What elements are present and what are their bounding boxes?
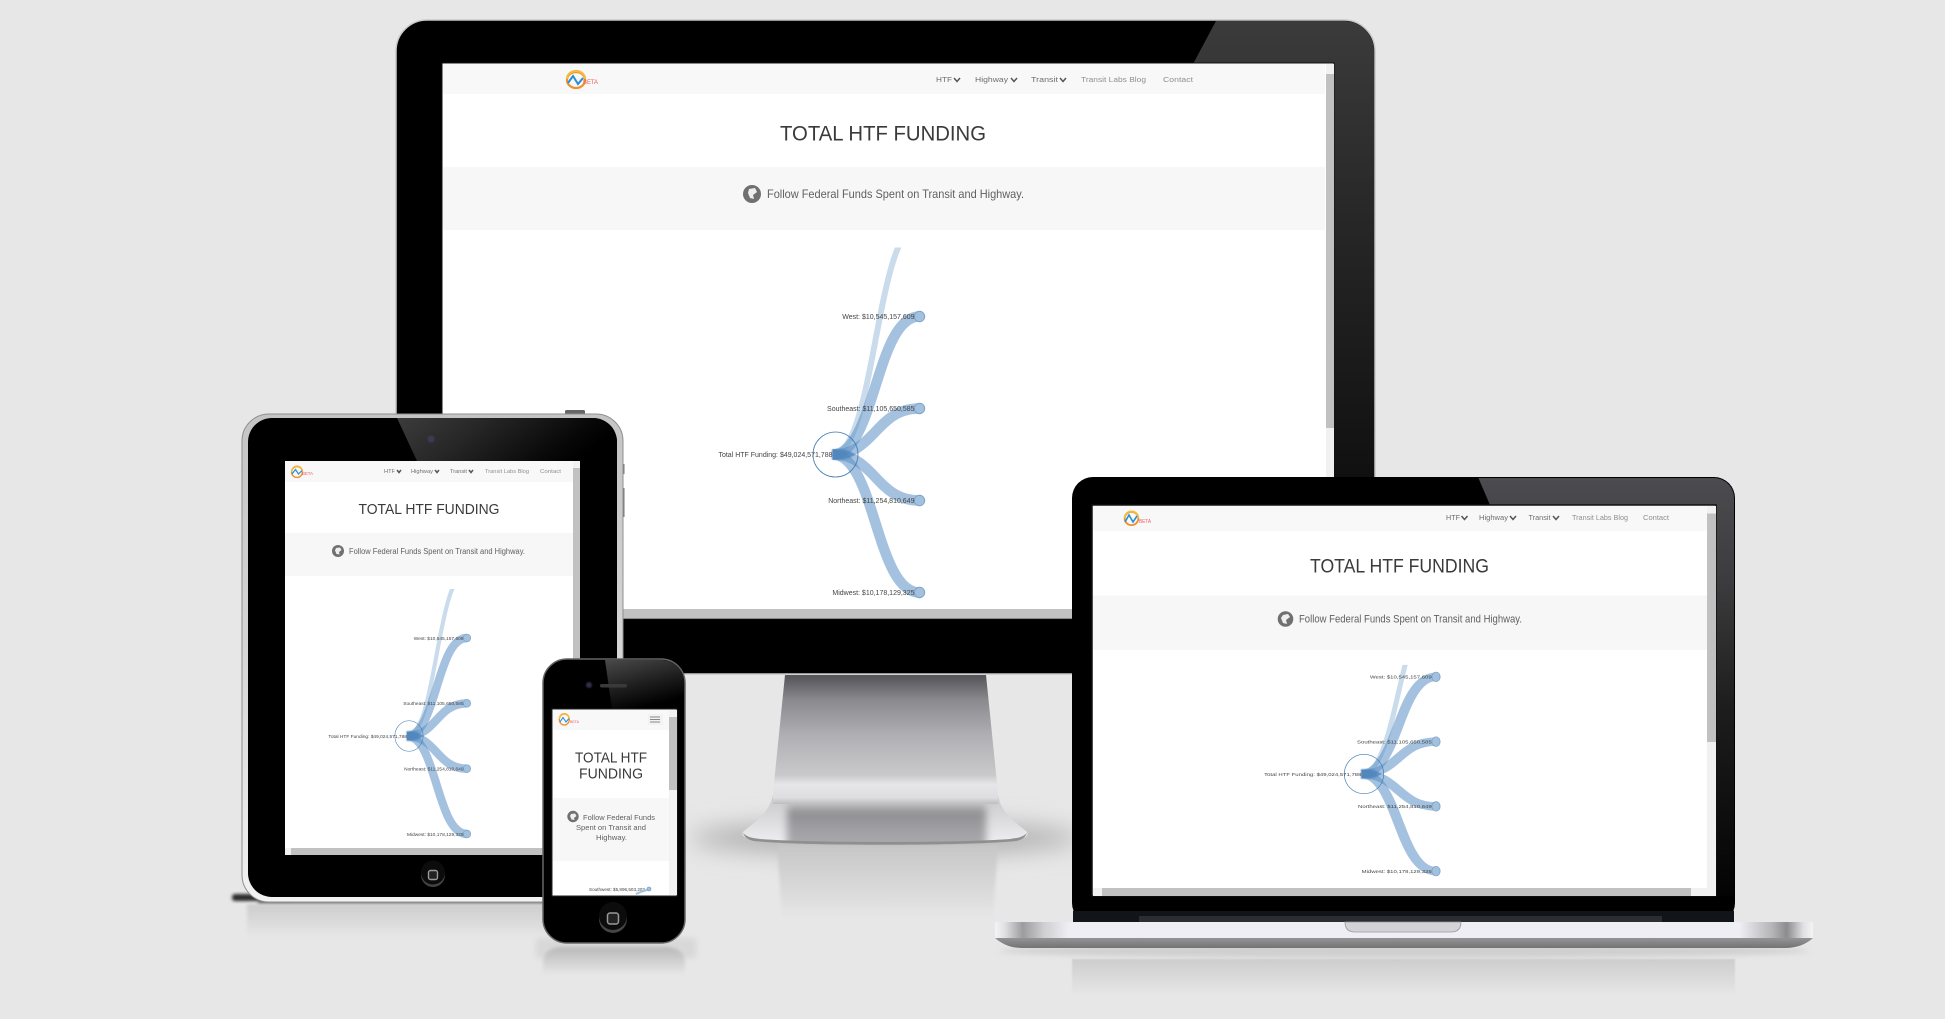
heading: TOTAL HTF FUNDING (1310, 556, 1489, 578)
tablet mockup (232, 410, 624, 938)
navbar: Transit Labs Blog (485, 469, 529, 475)
navbar: Transit (1528, 513, 1551, 522)
icon: globe (1278, 611, 1293, 627)
icon: globe (567, 811, 579, 822)
subtitle band (1093, 596, 1707, 650)
tree flow chart: Northeast: $11,254,810,649 (404, 766, 464, 772)
scrollbar (669, 710, 677, 895)
navbar (553, 710, 669, 730)
monitor bezel (396, 20, 1375, 674)
subtitle band: Follow Federal Funds (583, 813, 655, 822)
monitor stand (742, 675, 1028, 855)
navbar: Transit (1031, 75, 1059, 84)
heading: TOTAL HTF FUNDING (358, 501, 500, 518)
tablet body (242, 414, 623, 902)
tablet home button (421, 860, 445, 887)
laptop lid (1072, 477, 1735, 924)
phone glare (605, 660, 684, 709)
tree flow chart: Total HTF Funding: $49,024,571,788 (1264, 772, 1361, 778)
subtitle band: Follow Federal Funds Spent on Transit and Highway. (349, 547, 525, 556)
logo: BETA (302, 471, 313, 476)
tablet screen (285, 461, 580, 855)
tree flow chart (718, 224, 925, 598)
navbar: HTF (384, 469, 396, 475)
logo (292, 466, 313, 477)
navbar (1093, 506, 1707, 531)
navbar: Highway (975, 75, 1008, 84)
phone body (543, 659, 685, 943)
tree flow chart: Southeast: $11,105,650,585 (403, 701, 464, 707)
laptop notch (1345, 922, 1461, 932)
scrollbars (1093, 506, 1716, 896)
navbar: Contact (540, 469, 562, 475)
stand rim (743, 833, 1027, 845)
laptop base (995, 922, 1813, 948)
navbar: Transit (450, 469, 467, 475)
heading (575, 750, 647, 782)
subtitle band: Highway. (596, 833, 627, 842)
subtitle band: Spent on Transit and (576, 823, 646, 832)
phone shadow and reflection (536, 938, 696, 975)
navbar (443, 64, 1325, 94)
monitor stand shadow and reflection (690, 821, 1080, 920)
subtitle band (285, 533, 573, 576)
laptop hinge strip (1073, 911, 1734, 923)
laptop mockup (995, 477, 1813, 996)
tablet camera (428, 436, 434, 442)
logo: BETA (570, 719, 579, 724)
desktop monitor mockup (396, 20, 1375, 920)
tree flow chart: Midwest: $10,178,129,325 (1362, 869, 1432, 875)
tree flow chart (1264, 664, 1440, 876)
heading: TOTAL HTF (575, 750, 647, 766)
tree flow chart: Northeast: $11,254,810,649 (828, 498, 915, 505)
tree flow chart: Midwest: $10,178,129,325 (407, 832, 464, 838)
phone home button (599, 902, 627, 933)
tree flow chart: West: $10,545,157,609 (842, 314, 915, 321)
icon: globe (332, 545, 344, 557)
laptop glare (1478, 477, 1735, 896)
stand neck (773, 675, 998, 804)
tree flow chart: Northeast: $11,254,810,649 (1358, 805, 1432, 810)
logo (567, 71, 598, 88)
heading: TOTAL HTF FUNDING (780, 122, 986, 146)
tree flow chart: Midwest: $10,178,129,325 (832, 590, 915, 597)
navbar: HTF (1446, 513, 1460, 522)
tablet side buttons (565, 410, 624, 517)
tablet shadow and reflection (232, 894, 620, 938)
chart fragment: Southwest: $5,896,503,203 (589, 887, 645, 893)
icon: globe (743, 185, 761, 203)
monitor screen (442, 63, 1334, 619)
scrollbars (285, 461, 580, 855)
tree flow chart: Southeast: $11,105,650,585 (1357, 740, 1432, 745)
stand neck lower shade (782, 804, 990, 842)
phone mockup (536, 659, 696, 975)
laptop screen (1092, 505, 1716, 896)
logo: BETA (1139, 519, 1151, 525)
subtitle band: Follow Federal Funds Spent on Transit and Highway. (1299, 614, 1522, 626)
subtitle band (443, 167, 1325, 230)
scrollbars (443, 64, 1334, 618)
chart fragment (589, 887, 651, 894)
logo: BETA (583, 80, 598, 86)
icon: hamburger menu (648, 714, 663, 725)
subtitle band (553, 798, 669, 861)
monitor glare (1193, 21, 1375, 480)
navbar: Transit Labs Blog (1081, 75, 1146, 84)
navbar: Contact (1643, 513, 1670, 522)
phone camera and speaker (586, 682, 627, 688)
tablet bezel (248, 418, 617, 897)
navbar (285, 461, 573, 482)
phone screen (552, 709, 677, 896)
tree flow chart: Total HTF Funding: $49,024,571,788 (328, 734, 407, 740)
logo (1125, 511, 1151, 525)
navbar: Transit Labs Blog (1572, 513, 1628, 522)
tree flow chart (328, 573, 471, 838)
navbar: Contact (1163, 75, 1194, 84)
subtitle band: Follow Federal Funds Spent on Transit and Highway. (767, 187, 1024, 201)
tree flow chart: Southeast: $11,105,650,585 (827, 406, 915, 413)
stand foot (742, 795, 1028, 843)
tree flow chart: West: $10,545,157,609 (1370, 675, 1432, 680)
navbar: Highway (411, 469, 433, 475)
tablet glare (397, 418, 617, 461)
heading: FUNDING (579, 766, 643, 782)
tree flow chart: West: $10,545,157,609 (414, 636, 464, 642)
tree flow chart: Total HTF Funding: $49,024,571,788 (718, 452, 833, 459)
navbar: Highway (1479, 513, 1508, 522)
navbar: HTF (936, 75, 952, 84)
laptop shadow and reflection (999, 944, 1809, 996)
